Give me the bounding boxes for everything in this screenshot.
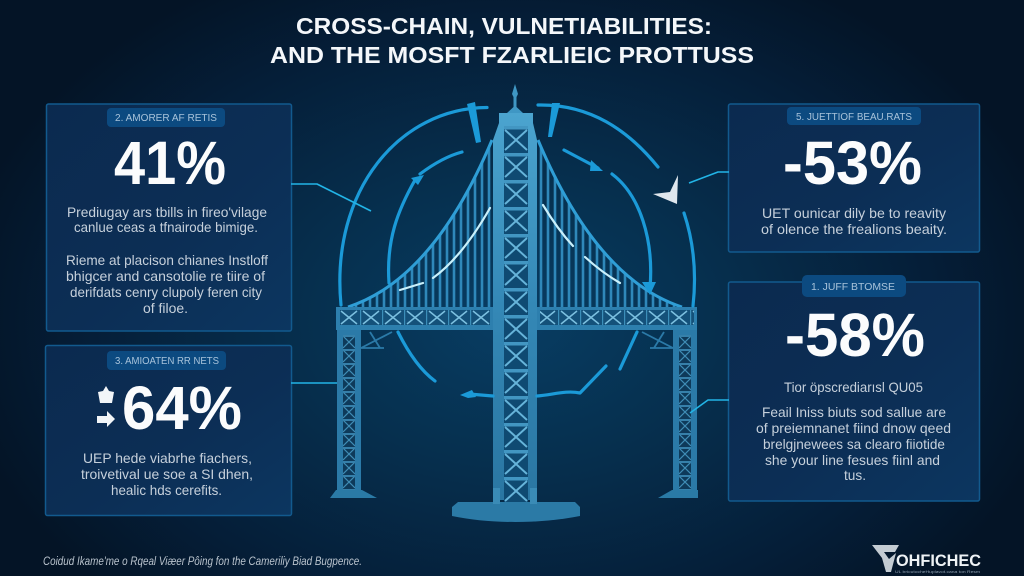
description: troivetival ue soe a SI dhen, — [81, 466, 253, 482]
description: Prediugay ars tbills in fireo'vilage — [67, 204, 267, 220]
connector lines — [291, 172, 729, 413]
bridge deck — [336, 307, 697, 330]
bridge illustration — [330, 84, 698, 522]
cycle arrows around the bridge — [340, 102, 695, 398]
icon: white glyphs — [97, 386, 115, 427]
description: UET ounicar dily be to reavity — [762, 205, 946, 221]
badge — [107, 108, 225, 127]
title: AND THE MOSFT FZARLIEIC PROTTUSS — [270, 42, 754, 68]
title — [270, 13, 754, 68]
description: of preiemnanet fiind dnow qeed — [756, 420, 951, 436]
panel: -53% — [728, 104, 980, 252]
arrow: outer right — [538, 103, 658, 167]
description — [66, 204, 268, 316]
stat: -53% — [783, 129, 922, 197]
logo — [872, 545, 981, 574]
arrow: far right — [684, 213, 695, 306]
icon: logo mark — [872, 545, 899, 572]
description: of olence the frealions beaity. — [761, 221, 947, 237]
badge — [787, 107, 921, 125]
panel: 64% — [46, 346, 292, 516]
arrow: inner right — [564, 150, 656, 295]
badge: 1. JUFF BTOMSE — [811, 282, 895, 293]
panel: 41% — [46, 104, 292, 331]
description: she your line fesues fiinl and — [765, 452, 940, 468]
footer note: Coidud Ikame'me o Rqeal Viæer Pôing fon the Cameriliy Biad Bugpence. — [43, 554, 362, 568]
white highlight cables — [400, 205, 620, 290]
description: UEP hede viabrhe fiachers, — [83, 450, 252, 466]
arrow: lower centre right — [537, 366, 606, 396]
central tower — [452, 84, 580, 522]
stat: 64% — [122, 374, 242, 442]
badge: 3. AMIOATEN RR NETS — [115, 356, 219, 367]
description: tus. — [844, 467, 866, 483]
subheading: Tior öpscrediarısl QU05 — [784, 379, 923, 395]
badge: 5. JUETTIOF BEAU.RATS — [796, 112, 912, 123]
description: healic hds cerefits. — [111, 482, 222, 498]
arrow: lower centre left — [460, 390, 493, 398]
description: Feail Iniss biuts sod sallue are — [762, 404, 946, 420]
left side tower — [330, 330, 392, 498]
description — [81, 450, 253, 498]
icon: white check — [653, 175, 678, 204]
arrow: inner left — [389, 152, 462, 283]
description: canlue ceas a tfnairode bimige. — [74, 219, 258, 235]
panel: -58% — [728, 275, 980, 501]
badge — [802, 275, 906, 297]
badge — [107, 351, 226, 370]
right suspension cable and hangers — [538, 140, 682, 307]
arrow: outer left — [340, 102, 487, 305]
description — [761, 205, 947, 237]
description: brelgjnewees sa clearo fiiotide — [763, 436, 945, 452]
arrow: lower left — [398, 332, 435, 381]
stat: -58% — [785, 301, 925, 369]
badge: 2. AMORER AF RETIS — [115, 113, 217, 124]
arrow: lower right — [620, 332, 637, 369]
description: of filoe. — [143, 300, 188, 316]
left suspension cable and hangers — [348, 140, 492, 307]
right side tower — [642, 330, 698, 498]
description: Rieme at placison chianes Instloff — [66, 252, 268, 268]
description — [756, 404, 951, 483]
stat: 41% — [114, 129, 226, 197]
logo: OHFICHEC — [896, 552, 981, 570]
logo: UL bricutocheHuplavot.cana ton Resm — [895, 569, 981, 574]
title: CROSS-CHAIN, VULNETIABILITIES: — [296, 13, 712, 39]
description: derifdats cenry clupoly feren city — [70, 284, 262, 300]
description: bhigcer and cansotolie re tiire of — [66, 268, 265, 284]
